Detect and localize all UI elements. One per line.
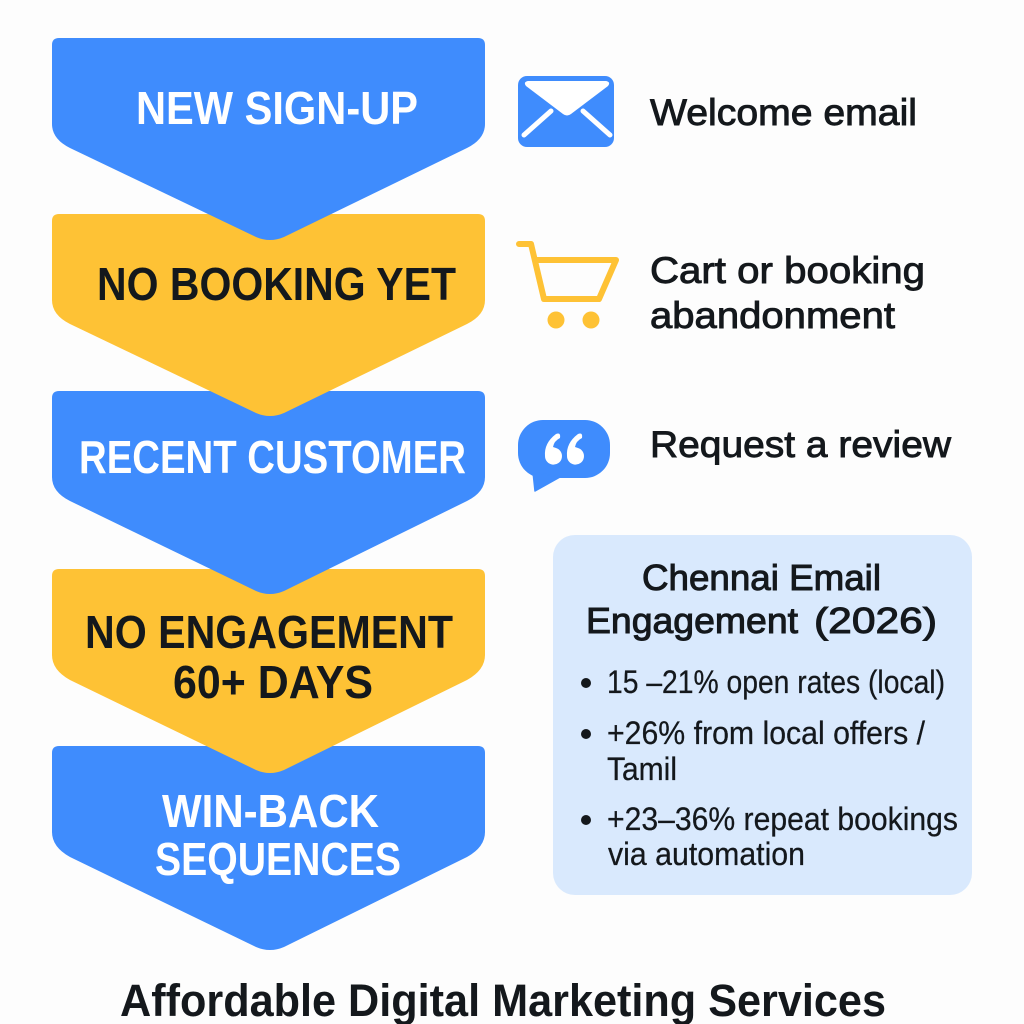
funnel step: no booking yet: NO BOOKING YET [97,258,456,310]
funnel step: win-back sequences: SEQUENCES [155,833,401,885]
funnel step: no engagement 60+ days: NO ENGAGEMENT [85,606,453,658]
funnel step: win-back sequences: WIN-BACK [162,785,379,837]
funnel step: no engagement 60+ days: 60+ DAYS [173,656,373,708]
panel heading [586,557,937,641]
action: cart or booking abandonment [650,250,925,336]
bullet: local offers: +26% from local offers / [607,715,925,751]
icon: shopping cart [519,244,616,328]
funnel step: no booking yet [52,214,485,416]
panel heading: (2026) [814,600,937,641]
funnel step: recent customer [52,391,485,594]
bullet: repeat bookings: +23–36% repeat bookings [607,801,958,837]
bullet: repeat bookings: via automation [608,836,805,872]
icon: envelope [518,76,614,147]
panel heading: Chennai Email [642,557,881,598]
action: cart or booking abandonment: abandonment [650,295,896,336]
action: cart or booking abandonment: Cart or booking [650,250,925,291]
icon: quote speech bubble [518,420,610,491]
action: request a review: Request a review [650,424,951,465]
funnel step: new sign-up: NEW SIGN-UP [136,82,418,134]
panel heading: Engagement [586,600,798,641]
funnel step: no engagement 60+ days [52,569,485,773]
bullet: open rates: 15 –21% open rates (local) [607,664,945,700]
bullet: repeat bookings [581,801,958,872]
funnel step: new sign-up [52,38,485,240]
panel: Chennai email engagement [553,535,972,895]
funnel step: win-back sequences [52,746,485,950]
funnel step: recent customer: RECENT CUSTOMER [79,431,466,483]
bullet: local offers: Tamil [607,751,677,787]
bullet: local offers [581,715,925,787]
action: welcome email: Welcome email [650,92,917,133]
